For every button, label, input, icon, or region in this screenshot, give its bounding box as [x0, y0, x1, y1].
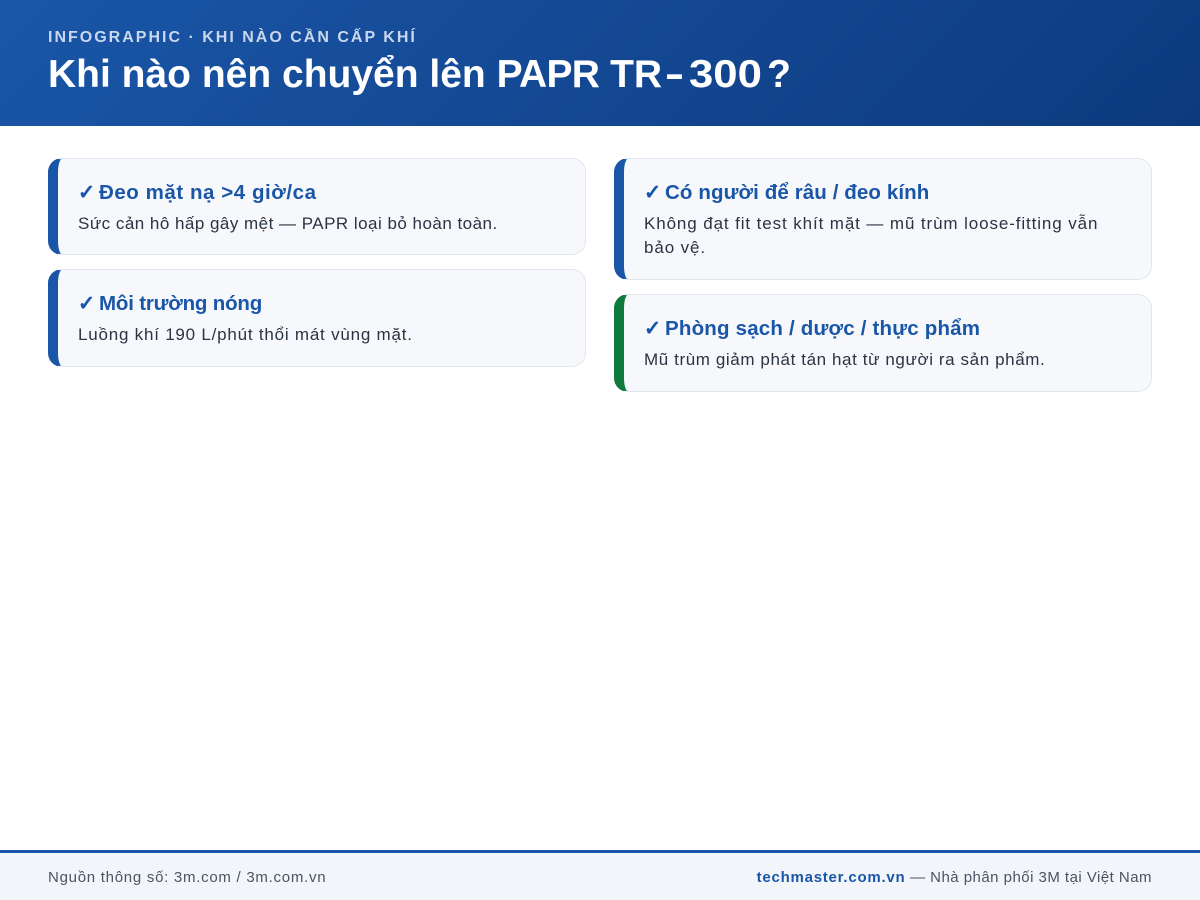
card text: bảo vệ. — [644, 238, 706, 257]
card heading: ✓ — [644, 181, 661, 204]
eyebrow label: INFOGRAPHIC · KHI NÀO CẦN CẤP KHÍ — [48, 29, 417, 46]
card: môi trường nóng — [48, 269, 586, 367]
card heading: ✓ — [78, 181, 96, 204]
card heading: Có người để râu / đeo kính — [665, 181, 929, 204]
source note: Nguồn thông số: 3m.com / 3m.com.vn — [48, 869, 326, 886]
card text: Luồng khí 190 L/phút thổi mát vùng mặt. — [78, 325, 413, 344]
card heading: ✓ — [644, 317, 661, 340]
title: - — [665, 53, 684, 96]
card: phòng sạch — [614, 294, 1152, 392]
card text: Không đạt fit test khít mặt — mũ trùm loose-fitting vẫn — [644, 214, 1098, 233]
footer — [0, 850, 1200, 900]
card text — [644, 214, 1098, 257]
card heading: Phòng sạch / dược / thực phẩm — [665, 317, 980, 340]
card text: Mũ trùm giảm phát tán hạt từ người ra sản phẩm. — [644, 350, 1045, 369]
card heading: Đeo mặt nạ >4 giờ/ca — [99, 181, 317, 204]
card heading: Môi trường nóng — [99, 292, 262, 315]
header — [0, 0, 1200, 126]
title: 300 — [689, 53, 762, 96]
card text: Sức cản hô hấp gây mệt — PAPR loại bỏ hoàn toàn. — [78, 214, 498, 233]
card heading: ✓ — [78, 292, 95, 315]
card: râu và kính — [614, 158, 1152, 280]
distributor credit: techmaster.com.vn — Nhà phân phối 3M tại Việt Nam — [757, 869, 1152, 886]
card: đeo mặt nạ lâu — [48, 158, 586, 255]
title: Khi nào nên chuyển lên PAPR TR ? — [48, 53, 791, 96]
